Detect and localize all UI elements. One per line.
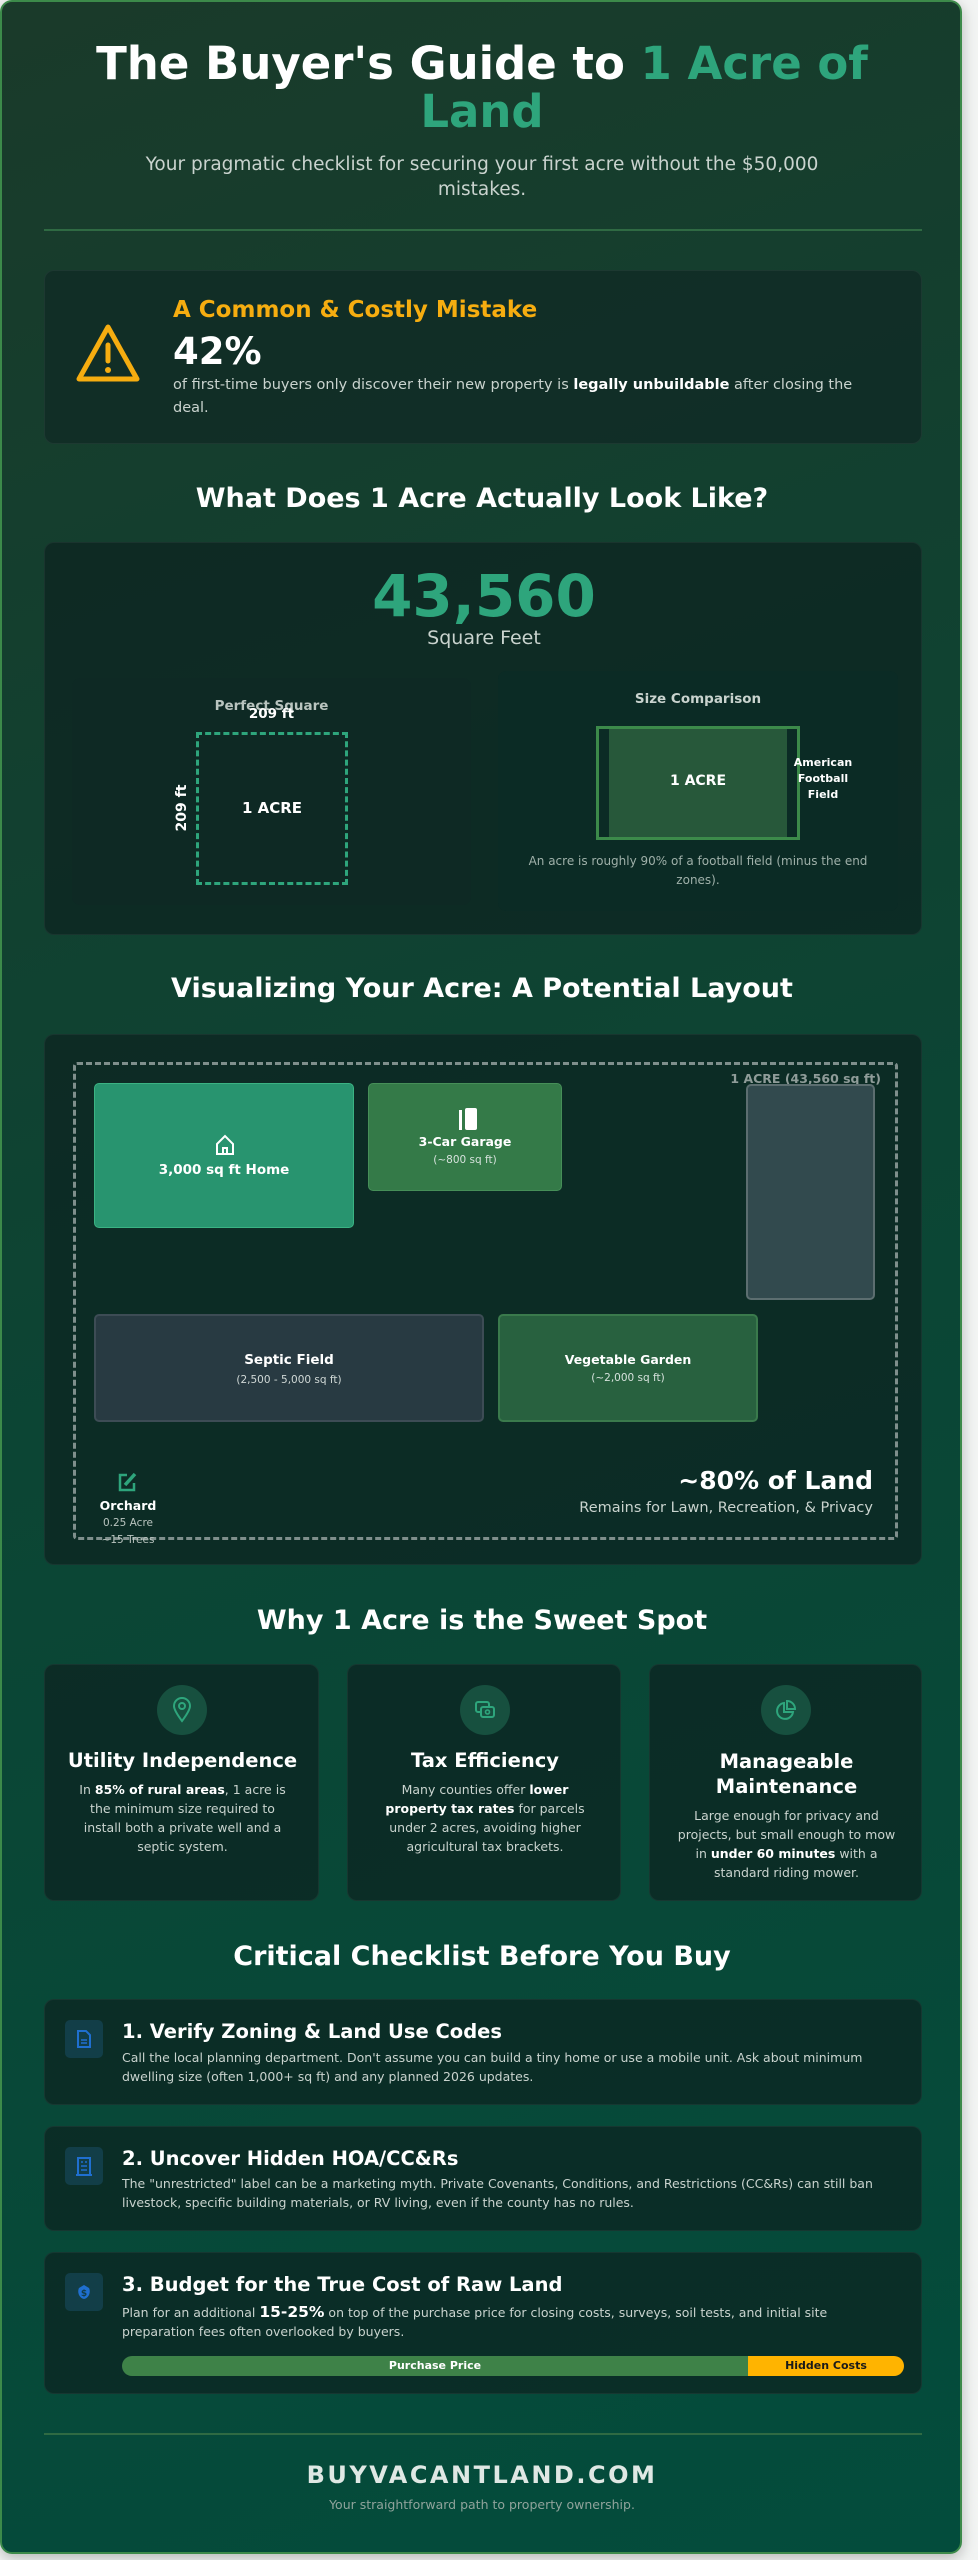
icon: warning: [76, 324, 140, 382]
remaining land: [579, 1466, 873, 1516]
acre boundary: [73, 1062, 898, 1540]
checklist item 2: The "unrestricted" label can be a marketing myth. Private Covenants, Conditions, and Restrictions (CC&Rs) can still ban livestock, specific building materials, or RV living, even if the county has no rules.: [122, 2176, 873, 2210]
orchard: Orchard: [100, 1498, 156, 1513]
sub-panel: perfect square: 209 ft: [174, 785, 190, 831]
orchard: [100, 1473, 156, 1546]
card: maintenance: [649, 1664, 922, 1901]
card: utility: In 85% of rural areas, 1 acre is the minimum size required to install both a private well and a septic system.: [79, 1782, 286, 1854]
text: of first-time buyers only discover their new property is legally unbuildable after closing the deal.: [173, 377, 852, 416]
heading: A Common & Costly Mistake: [173, 297, 537, 323]
football field: 1 ACRE: [670, 773, 726, 789]
title: The Buyer's Guide to 1 Acre of: [96, 37, 868, 90]
subtitle: Your pragmatic checklist for securing your first acre without the $50,000 mistakes.: [146, 154, 818, 200]
card: utility: [44, 1664, 319, 1901]
card: tax: [347, 1664, 621, 1901]
garage: 3-Car Garage: [419, 1134, 511, 1149]
home: 3,000 sq ft Home: [159, 1162, 289, 1178]
sub-panel: size comparison: [498, 671, 898, 911]
sub-panel: size comparison: Size Comparison: [635, 691, 761, 707]
sub-panel: perfect square: 1 ACRE: [242, 799, 302, 817]
sub-panel: perfect square: 209 ft: [249, 706, 294, 722]
orchard: 0.25 Acre: [103, 1517, 153, 1529]
vegetable garden: Vegetable Garden: [565, 1352, 691, 1367]
heading: checklist: Critical Checklist Before You Buy: [233, 1941, 731, 1972]
sub-panel: perfect square: Perfect Square: [215, 698, 328, 714]
vegetable garden: [498, 1314, 758, 1422]
card: tax: Tax Efficiency: [411, 1749, 559, 1772]
caption: An acre is roughly 90% of a football field (minus the end zones).: [529, 854, 867, 887]
panel: common mistake: [44, 270, 922, 444]
sub-panel: size comparison: American Football Field: [794, 756, 852, 801]
card: maintenance: Manageable: [720, 1750, 853, 1773]
unit: Square Feet: [427, 627, 541, 649]
checklist item 3: 3. Budget for the True Cost of Raw Land: [122, 2273, 562, 2296]
remaining land: Remains for Lawn, Recreation, & Privacy: [579, 1500, 873, 1516]
football field: [596, 726, 800, 840]
heading: what does 1 acre look like: What Does 1 Acre Actually Look Like?: [196, 483, 768, 514]
heading: layout: Visualizing Your Acre: A Potential Layout: [171, 973, 793, 1004]
garage: [368, 1083, 562, 1191]
septic field: (2,500 - 5,000 sq ft): [236, 1374, 342, 1386]
vegetable garden: (~2,000 sq ft): [591, 1372, 665, 1384]
stat: 42%: [173, 330, 262, 373]
card: maintenance: Maintenance: [716, 1775, 857, 1798]
orchard: ~15 Trees: [102, 1534, 154, 1546]
checklist item 1: [44, 1999, 922, 2105]
footer brand: BUYVACANTLAND.COM: [307, 2461, 657, 2489]
cost bar: Hidden Costs: [785, 2359, 867, 2372]
garage: (~800 sq ft): [433, 1154, 497, 1166]
title: Land: [420, 85, 544, 138]
card: utility: Utility Independence: [68, 1749, 297, 1772]
card: tax: Many counties offer lower property tax rates for parcels under 2 acres, avoiding higher agricultural tax brackets.: [385, 1782, 585, 1854]
panel: layout: [44, 1034, 922, 1565]
checklist item 3: Plan for an additional 15-25% on top of the purchase price for closing costs, surveys, soil tests, and initial site preparation fees often overlooked by buyers.: [122, 2303, 827, 2339]
home: [94, 1083, 354, 1228]
panel: layout: 1 ACRE (43,560 sq ft): [730, 1071, 881, 1086]
card: maintenance: Large enough for privacy and projects, but small enough to mow in under 60 minutes with a standard riding mower.: [678, 1808, 895, 1880]
septic field: Septic Field: [244, 1352, 334, 1368]
heading: sweet spot: Why 1 Acre is the Sweet Spot: [257, 1605, 707, 1636]
septic field: [94, 1314, 484, 1422]
footer tagline: Your straightforward path to property ownership.: [329, 2497, 635, 2512]
title: [96, 37, 868, 138]
sub-panel: perfect square: [72, 678, 471, 905]
checklist item 2: [44, 2126, 922, 2231]
big number: 43,560: [372, 562, 596, 630]
remaining land: ~80% of Land: [678, 1466, 873, 1495]
checklist item 3: $: [81, 2289, 87, 2299]
checklist item 3: [44, 2252, 922, 2394]
panel: acre size: [44, 542, 922, 935]
checklist item 1: Call the local planning department. Don't assume you can build a tiny home or use a mobile unit. Ask about minimum dwelling size (often 1,000+ sq ft) and any planned 2026 updates.: [122, 2050, 862, 2084]
checklist item 1: 1. Verify Zoning & Land Use Codes: [122, 2020, 502, 2043]
cost bar: [122, 2356, 904, 2376]
dashed square: [196, 732, 348, 885]
driveway: [746, 1084, 875, 1300]
cost bar: Purchase Price: [389, 2359, 481, 2372]
checklist item 2: 2. Uncover Hidden HOA/CC&Rs: [122, 2147, 458, 2170]
